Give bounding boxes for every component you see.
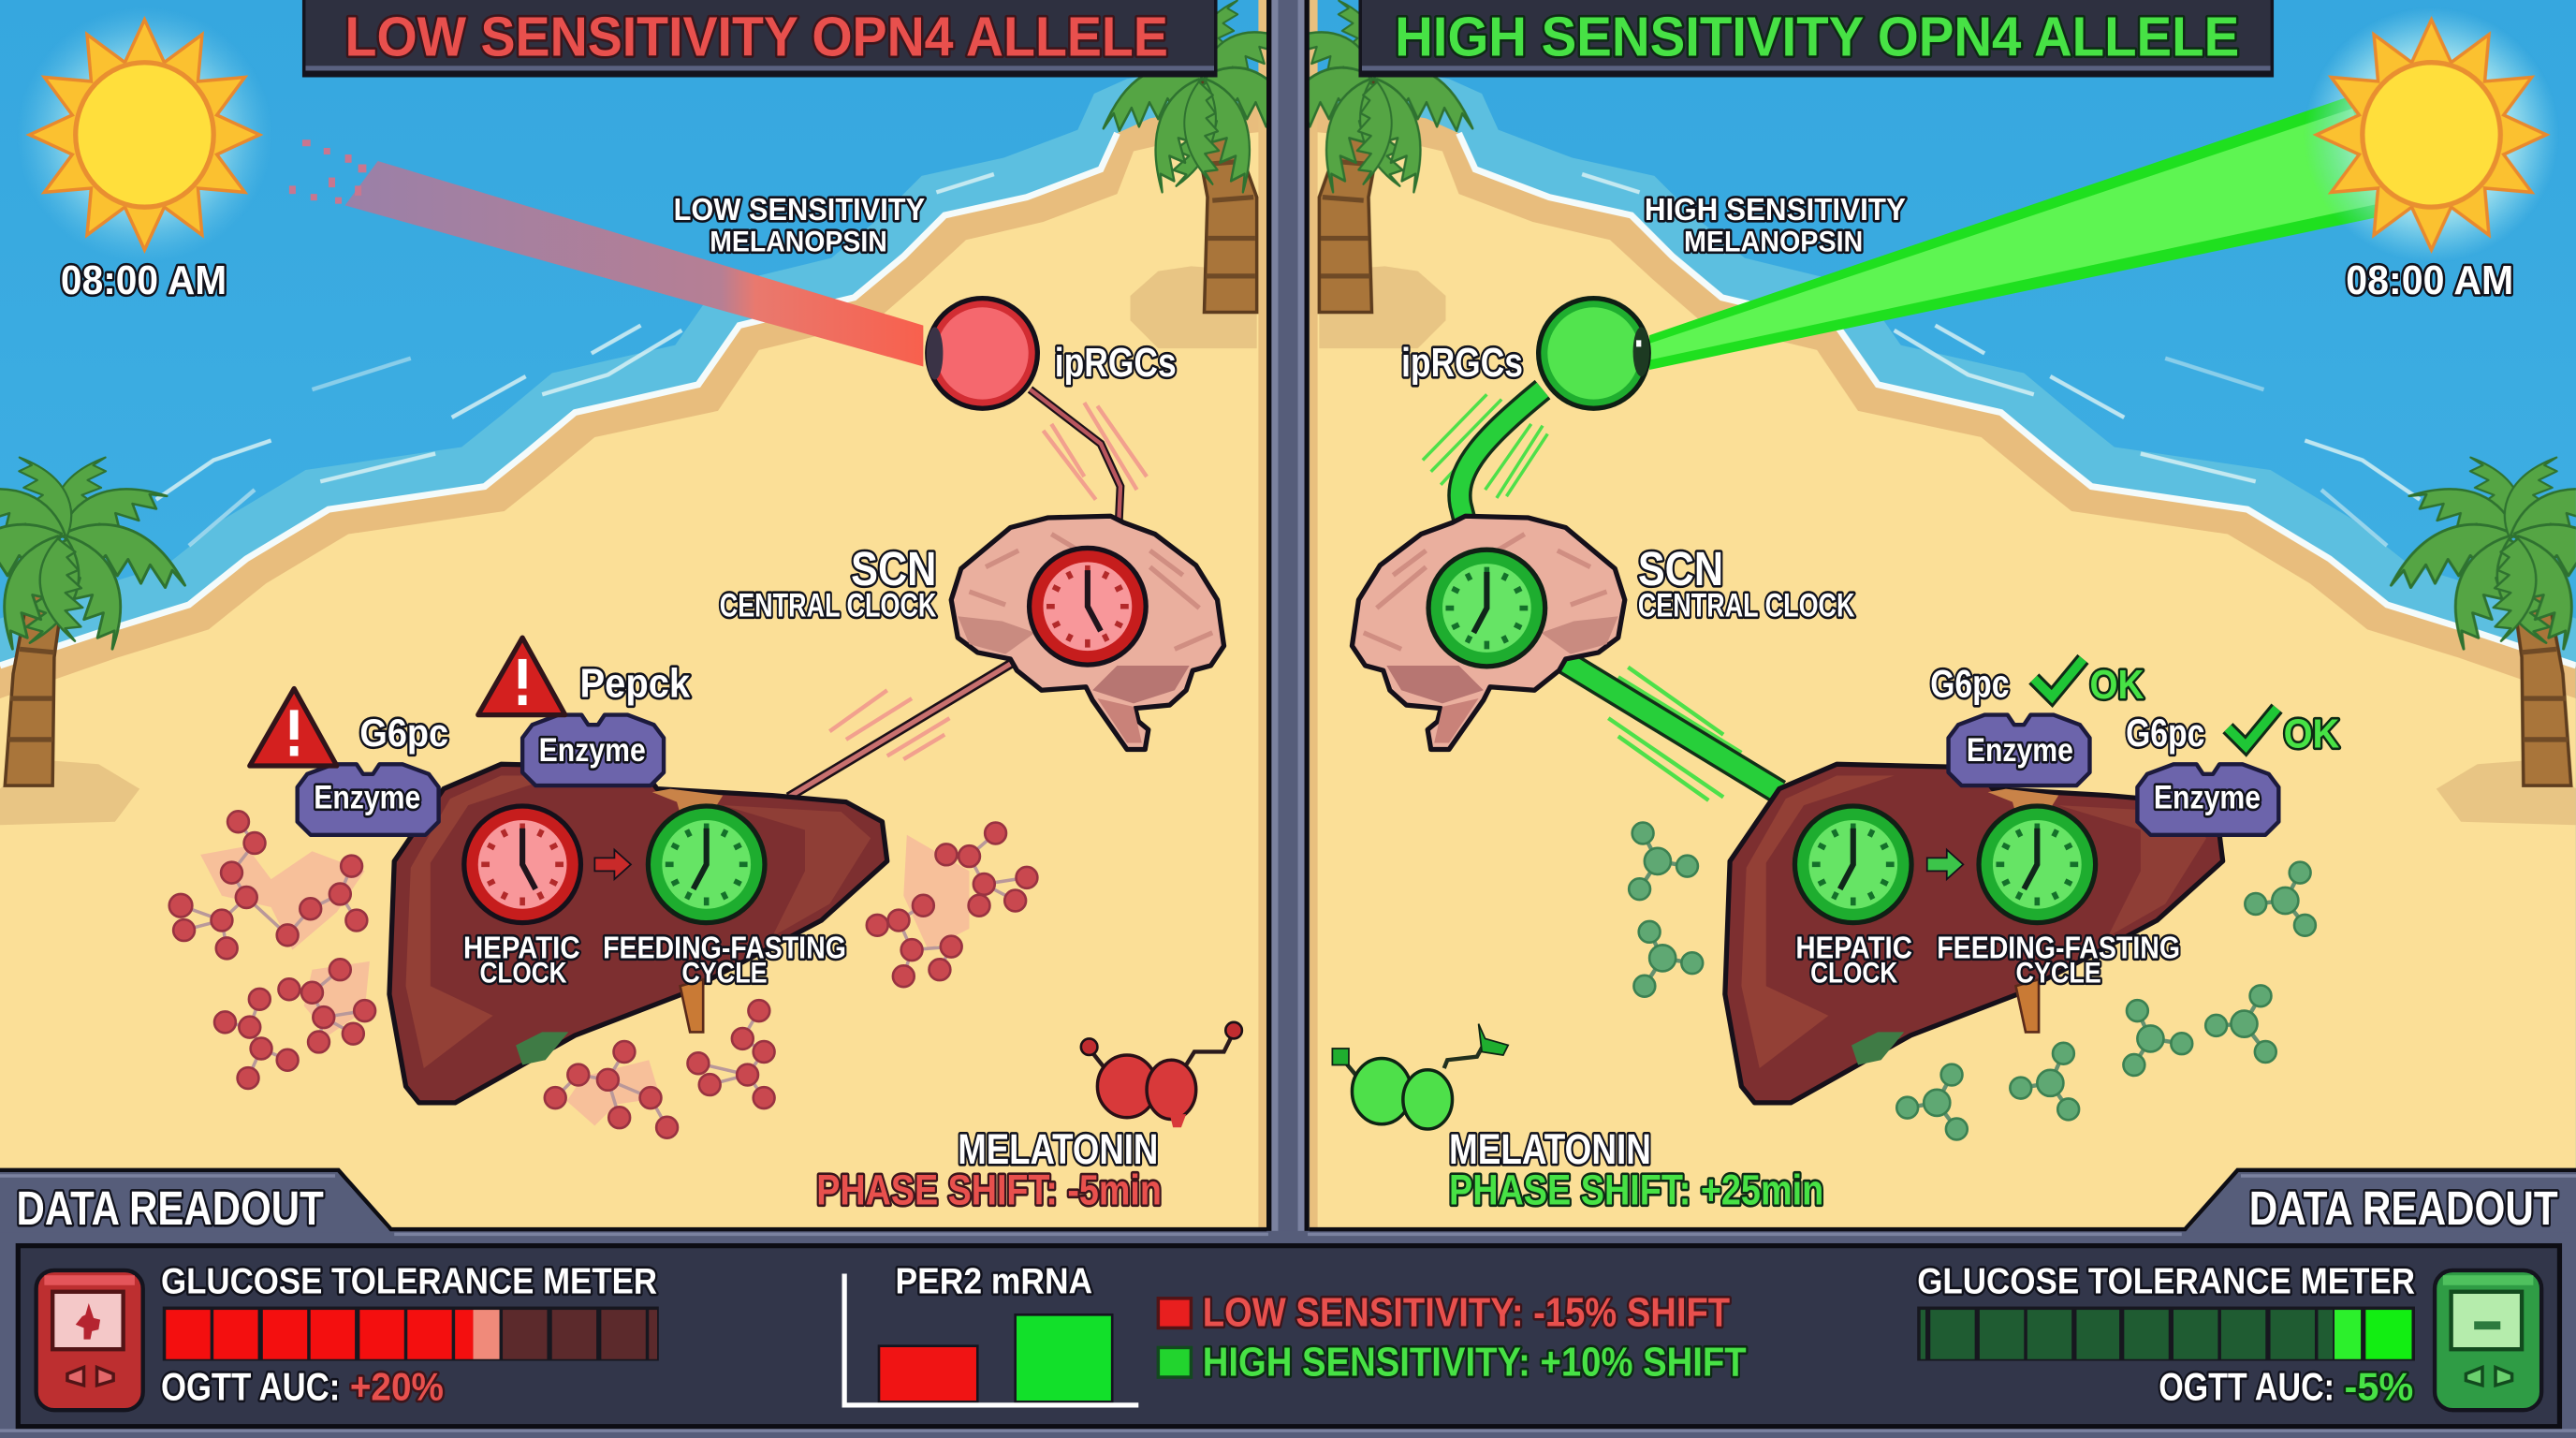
time label right: 08:00 AM (2346, 257, 2513, 303)
red ipRGC eye (925, 296, 1040, 411)
ipRGCs label left: ipRGCs (1055, 340, 1177, 386)
legend low sensitivity: LOW SENSITIVITY: -15% SHIFT (1203, 1290, 1730, 1336)
hepatic clock label left (463, 931, 580, 990)
G6pc OK status lower right (2126, 709, 2340, 757)
melatonin phase shift label right: PHASE SHIFT: +25min (1449, 1167, 1823, 1214)
panel: high sensitivity beach scene (1267, 0, 2576, 1233)
glucose device icon green (2435, 1270, 2541, 1410)
liver right (1725, 764, 2223, 1103)
glucose molecules green (1629, 823, 2316, 1139)
glucose molecules red: cluster E (867, 823, 1037, 987)
melatonin molecule red (1081, 1022, 1242, 1127)
data readout tab label left: DATA READOUT (17, 1181, 324, 1235)
OGTT AUC value left: OGTT AUC: (161, 1365, 340, 1409)
liver left (389, 764, 887, 1103)
misalignment arrow left (594, 850, 631, 879)
enzyme badge right top: Enzyme (1967, 732, 2073, 769)
hepatic clock left (461, 803, 583, 925)
G6pc label left: G6pc (359, 711, 448, 755)
G6pc OK status upper right: OK (2089, 662, 2144, 708)
PER2 mRNA bar chart: PER2 mRNA (896, 1262, 1092, 1302)
G6pc OK status lower right: OK (2284, 712, 2340, 757)
time label left: 08:00 AM (61, 257, 227, 303)
enzyme badge right lower: Enzyme (2154, 780, 2261, 816)
enzyme badge Pepck left (522, 715, 664, 785)
warning icon G6pc (250, 689, 337, 766)
enzyme badge Pepck left: Enzyme (539, 732, 646, 769)
ipRGCs label right: ipRGCs (1401, 340, 1523, 386)
SCN label right: SCN (1638, 542, 1723, 595)
sun: right (2304, 7, 2559, 263)
feeding-fasting label right: FEEDING-FASTING (1937, 931, 2180, 965)
warning icon Pepck (478, 638, 565, 715)
panel: low sensitivity beach scene (0, 0, 1309, 1233)
legend high sensitivity: HIGH SENSITIVITY: +10% SHIFT (1203, 1339, 1747, 1385)
title banner left: LOW SENSITIVITY OPN4 ALLELE (345, 6, 1168, 68)
hepatic clock label left: HEPATIC (463, 931, 580, 965)
feeding-fasting clock left (646, 803, 768, 925)
G6pc OK status upper right (1930, 659, 2144, 708)
glucose meter title left: GLUCOSE TOLERANCE METER (161, 1262, 657, 1302)
low sensitivity melanopsin label: LOW SENSITIVITY (674, 193, 925, 227)
feeding-fasting clock right (1976, 803, 2098, 925)
enzyme badge right lower (2137, 764, 2278, 835)
glucose molecules red: cluster A (169, 811, 367, 959)
hepatic clock right (1793, 803, 1914, 925)
glucose meter bar left (163, 1307, 659, 1360)
feeding-fasting label left: FEEDING-FASTING (603, 931, 846, 965)
enzyme badge G6pc left: Enzyme (314, 780, 420, 816)
glucose molecules red: cluster D (545, 1041, 678, 1138)
hepatic clock label left: CLOCK (479, 956, 567, 990)
left nerve and motion marks (788, 389, 1147, 797)
brain with central clock: left (951, 516, 1224, 749)
enzyme badge right top (1949, 715, 2089, 785)
enzyme badge G6pc left (298, 764, 439, 835)
low sensitivity melanopsin label: MELANOPSIN (710, 225, 887, 258)
high sensitivity melanopsin label (1645, 193, 1906, 258)
feeding-fasting label right: CYCLE (2016, 956, 2101, 990)
brain with central clock: right (1352, 516, 1625, 749)
PER2 mRNA bar chart (844, 1262, 1138, 1405)
strong green light beam (1649, 95, 2378, 370)
SCN label right: CENTRAL CLOCK (1638, 587, 1855, 624)
melatonin phase shift label right (1449, 1125, 1823, 1214)
OGTT AUC value left: +20% (350, 1365, 444, 1409)
melatonin phase shift label left: PHASE SHIFT: -5min (816, 1167, 1162, 1214)
G6pc OK status lower right: G6pc (2126, 711, 2204, 755)
weak red light beam (289, 139, 923, 366)
title banner right: HIGH SENSITIVITY OPN4 ALLELE (1395, 6, 2239, 68)
feeding-fasting label left (603, 931, 846, 990)
high sensitivity melanopsin label: MELANOPSIN (1684, 225, 1863, 258)
OGTT AUC value right: -5% (2345, 1365, 2413, 1409)
aligned arrow right (1927, 850, 1963, 879)
bottom data panel frame (0, 1170, 2576, 1438)
green ipRGC eye (1536, 296, 1651, 411)
melatonin phase shift label right: MELATONIN (1449, 1125, 1651, 1173)
glucose device icon red (37, 1270, 143, 1410)
hepatic clock label right: CLOCK (1810, 956, 1897, 990)
sun: right glow (2304, 7, 2559, 263)
glucose molecules red: cluster C (688, 1000, 775, 1108)
feeding-fasting label right (1937, 931, 2180, 990)
feeding-fasting label left: CYCLE (681, 956, 768, 990)
central divider (1266, 0, 1310, 1236)
OGTT AUC value right: OGTT AUC: (2159, 1365, 2334, 1409)
pale glucose splotches left (200, 835, 970, 1125)
glucose meter bar right (1917, 1307, 2415, 1360)
glucose molecules red: cluster B (214, 959, 375, 1089)
right nerve and motion marks (1423, 389, 1779, 800)
melatonin phase shift label left (816, 1125, 1162, 1214)
melatonin molecule green (1332, 1024, 1508, 1129)
glucose meter title right: GLUCOSE TOLERANCE METER (1917, 1262, 2415, 1302)
melatonin phase shift label left: MELATONIN (958, 1125, 1158, 1173)
SCN label left: SCN (851, 542, 936, 595)
sun: left (17, 7, 272, 263)
SCN label right (1638, 542, 1855, 624)
hepatic clock label right (1795, 931, 1912, 990)
high sensitivity melanopsin label: HIGH SENSITIVITY (1645, 193, 1906, 227)
SCN label left (720, 542, 937, 624)
hepatic clock label right: HEPATIC (1795, 931, 1912, 965)
low sensitivity melanopsin label (674, 193, 925, 258)
Pepck label: Pepck (580, 660, 691, 706)
G6pc OK status upper right: G6pc (1930, 661, 2009, 705)
SCN label left: CENTRAL CLOCK (720, 587, 937, 624)
